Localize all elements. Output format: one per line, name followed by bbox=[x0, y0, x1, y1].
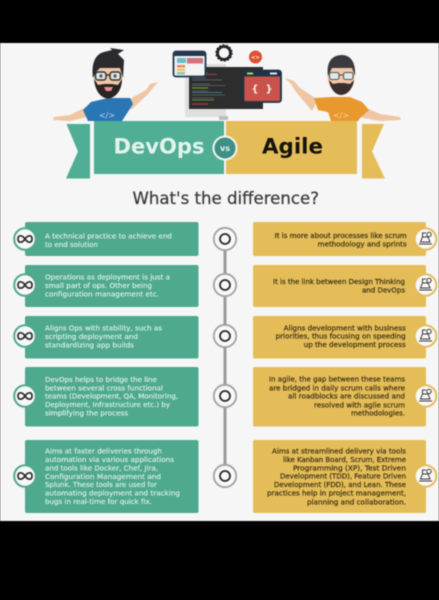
vs badge: vs bbox=[220, 144, 230, 153]
character: DevOps developer: </> bbox=[99, 111, 115, 120]
Agile card 4: In agile, the gap between these teams bbox=[269, 376, 405, 384]
DevOps card 5: Aims at faster deliveries through bbox=[45, 448, 162, 456]
infographic background panel bbox=[0, 43, 439, 521]
DevOps card 5: bugs in real-time for quick fix. bbox=[45, 498, 152, 506]
Agile card 5: planning and collaboration. bbox=[307, 498, 406, 506]
banner: Agile: Agile bbox=[262, 134, 323, 158]
DevOps card 4: between several cross functional bbox=[45, 384, 163, 392]
Agile card 1: methodology and sprints bbox=[318, 240, 407, 248]
DevOps card 5: automation via various applications bbox=[45, 456, 174, 464]
Agile card 3: up the development process bbox=[304, 341, 406, 349]
DevOps card 4 bbox=[14, 367, 199, 426]
DevOps card 3: scripting deployment and bbox=[45, 333, 138, 341]
illustration: code monitor and windows: { } bbox=[251, 84, 273, 95]
Agile card 4: all roadblocks are discussed and bbox=[288, 393, 405, 401]
Agile card 4: methodologies. bbox=[351, 410, 405, 418]
Agile card 3: priorities, thus focusing on speeding bbox=[276, 332, 406, 340]
Agile card 2 bbox=[253, 265, 436, 307]
illustration: code monitor and windows bbox=[174, 52, 281, 120]
icon: red code badge: <> bbox=[251, 55, 260, 61]
Agile card 3 bbox=[253, 316, 436, 358]
character: DevOps developer bbox=[53, 48, 158, 121]
Agile card 5: Development (TDD), Feature Driven bbox=[280, 473, 406, 481]
DevOps card 4: teams (Development, QA, Monitoring, bbox=[45, 392, 178, 400]
Agile card 4: are bridged in daily scrum calls where bbox=[269, 384, 405, 392]
Agile card 5: Development (FDD), and Lean. These bbox=[274, 481, 406, 489]
Agile card 4: resolved with agile scrum bbox=[314, 401, 405, 409]
DevOps card 1: to end solution bbox=[45, 241, 98, 249]
Agile card 1 bbox=[253, 222, 436, 256]
Agile card 5 bbox=[253, 440, 436, 513]
banner: DevOps: DevOps bbox=[114, 134, 204, 158]
DevOps card 1 bbox=[14, 222, 199, 256]
DevOps card 5 bbox=[14, 440, 199, 513]
character: Agile developer bbox=[285, 55, 401, 121]
Agile card 5: Programming (XP), Test Driven bbox=[293, 464, 406, 472]
DevOps card 2: configuration management etc. bbox=[45, 290, 159, 298]
DevOps card 2: small part of ops. Other being bbox=[45, 282, 152, 290]
DevOps card 3: Aligns Ops with stability, such as bbox=[45, 324, 162, 332]
DevOps card 4: DevOps helps to bridge the line bbox=[45, 376, 157, 384]
vs badge bbox=[214, 136, 236, 160]
icon: red code badge bbox=[249, 50, 262, 64]
Agile card 5: like Kanban Board, Scrum, Extreme bbox=[283, 456, 406, 464]
banner ribbon tail: Agile bbox=[362, 124, 385, 178]
Agile card 5: Aims at streamlined delivery via tools bbox=[272, 448, 406, 456]
Agile card 3: Aligns development with business bbox=[284, 324, 406, 332]
Agile card 1: It is more about processes like scrum bbox=[275, 232, 407, 240]
Agile card 5: practices help in project management, bbox=[267, 490, 406, 498]
DevOps card 2: Operations as deployment is just a bbox=[45, 274, 170, 282]
Agile card 4 bbox=[253, 367, 436, 426]
icon: gear bbox=[216, 45, 232, 61]
Agile card 2: and DevOps bbox=[362, 286, 405, 294]
DevOps card 3: standardizing app builds bbox=[45, 341, 134, 349]
banner: DevOps bbox=[94, 121, 224, 174]
DevOps card 3 bbox=[14, 316, 199, 358]
DevOps card 1: A technical practice to achieve end bbox=[45, 232, 172, 240]
DevOps card 5: Configuration Management and bbox=[45, 473, 161, 481]
DevOps card 5: Splunk. These tools are used for bbox=[45, 481, 157, 489]
DevOps card 4: simplifying the process bbox=[45, 410, 128, 418]
DevOps card 5: automating deployment and tracking bbox=[45, 490, 180, 498]
Agile card 2: It is the link between Design Thinking bbox=[273, 278, 405, 286]
banner ribbon tail: DevOps bbox=[66, 124, 90, 178]
character: Agile developer: </> bbox=[333, 111, 349, 120]
DevOps card 4: Deployment, Infrastructure etc.) by bbox=[45, 401, 170, 409]
banner: Agile bbox=[226, 121, 357, 174]
DevOps card 2 bbox=[14, 265, 199, 307]
title: What's the difference? bbox=[132, 189, 319, 209]
DevOps card 5: and tools like Docker, Chef, Jira, bbox=[45, 464, 158, 472]
timeline: centre connector with gears bbox=[214, 228, 236, 487]
